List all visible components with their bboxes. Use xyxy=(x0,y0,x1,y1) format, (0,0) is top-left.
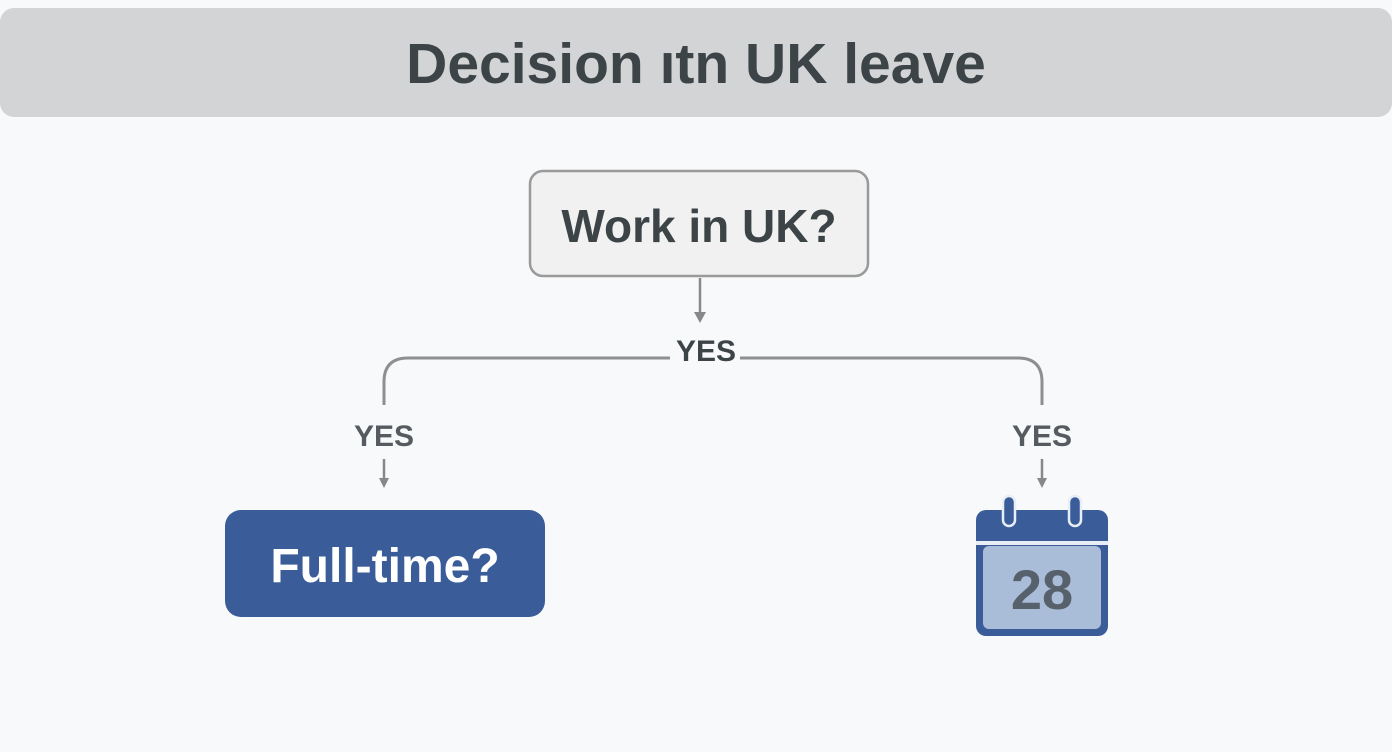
label: YES left: YES xyxy=(354,420,414,453)
title bar: Decision ıtn UK leave xyxy=(406,32,986,96)
label: YES right: YES xyxy=(1012,420,1072,453)
node: Work in UK? xyxy=(530,171,868,276)
node: Full-time?: Full-time? xyxy=(270,540,500,593)
icon: calendar 28 xyxy=(976,496,1108,636)
node: Full-time? xyxy=(225,510,545,617)
arrow: left xyxy=(379,459,389,488)
title bar xyxy=(0,8,1392,117)
arrow: down from Work in UK xyxy=(694,278,706,323)
icon: calendar 28: 28 xyxy=(1011,558,1073,621)
arrow: right xyxy=(1037,459,1047,488)
branch connector lines xyxy=(384,358,1042,405)
label: YES center: YES xyxy=(676,335,736,368)
node: Work in UK?: Work in UK? xyxy=(561,200,837,252)
